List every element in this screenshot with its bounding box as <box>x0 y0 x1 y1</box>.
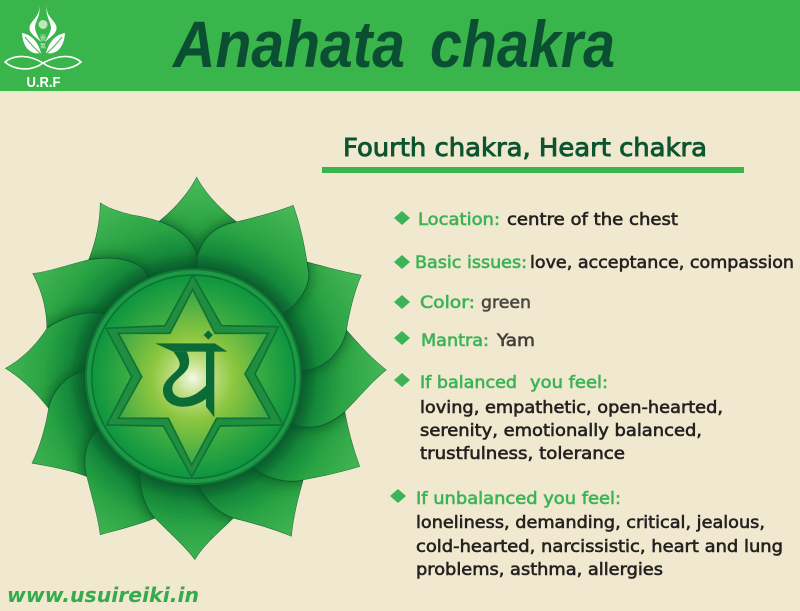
bullet: basic issues: Basic issues: <box>415 253 527 273</box>
petals <box>5 177 387 560</box>
subtitle underline <box>322 167 744 173</box>
bullet: if balanced: you feel: <box>530 373 608 393</box>
title: Anahata <box>171 7 405 81</box>
bullet: mantra: Mantra: <box>421 331 489 351</box>
bullet: basic issues: love, acceptance, compassion <box>530 253 794 273</box>
logo: U.R.F: 靈 <box>40 33 46 42</box>
bullet: if balanced: trustfulness, tolerance <box>420 444 625 464</box>
bullet: location: centre of the chest <box>507 210 678 230</box>
website: www.usuireiki.in <box>7 583 199 607</box>
bullet: location <box>394 210 678 230</box>
bullet: if balanced: loving, empathetic, open-hearted, <box>420 398 723 418</box>
logo: U.R.F: 氣 <box>40 41 46 50</box>
bullet: location: Location: <box>418 210 500 230</box>
logo: U.R.F <box>5 6 81 91</box>
bija syllable mark <box>155 330 227 417</box>
bullet: if balanced: If balanced <box>420 373 517 393</box>
bullet: color: Color: <box>420 293 475 313</box>
disc <box>86 269 301 484</box>
bullet: if unbalanced: cold-hearted, narcissistic, heart and lung <box>416 537 783 557</box>
subtitle: Fourth chakra, Heart chakra <box>343 133 707 162</box>
bullet: if unbalanced: If unbalanced you feel: <box>416 489 621 509</box>
header banner <box>0 0 800 93</box>
title: chakra <box>430 7 615 81</box>
bullet: if balanced <box>394 373 723 464</box>
bullet: if unbalanced: problems, asthma, allergies <box>416 560 663 580</box>
bullet: color <box>394 293 531 313</box>
bullet: basic issues <box>394 253 794 273</box>
bullet: if unbalanced: loneliness, demanding, critical, jealous, <box>416 513 765 533</box>
bullet: if balanced: serenity, emotionally balanced, <box>420 421 702 441</box>
title <box>171 7 615 81</box>
star of David <box>106 275 283 477</box>
bullet: color: green <box>481 293 531 313</box>
bullet: mantra <box>394 331 535 351</box>
logo letters: U.R.F <box>26 74 60 91</box>
bullet: mantra: Yam <box>496 331 535 351</box>
bullet: if unbalanced <box>390 489 783 580</box>
chakra symbol <box>5 177 387 560</box>
